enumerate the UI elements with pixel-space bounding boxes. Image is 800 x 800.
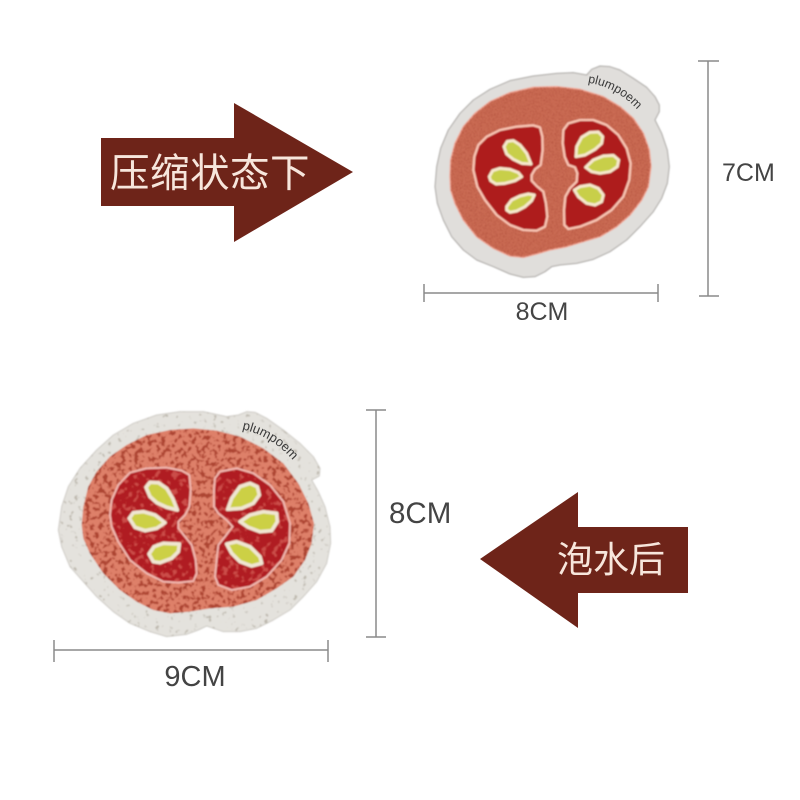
dimension: width 8CM xyxy=(424,284,658,302)
product: soaked tomato sponge xyxy=(57,410,332,638)
label: 8CM width: 8CM xyxy=(516,298,568,326)
brand text: compressed: plumpoem xyxy=(588,75,641,109)
arrow: compressed state xyxy=(101,103,353,242)
brand text: soaked: plumpoem xyxy=(242,422,297,460)
label: after soaking: 泡水后 xyxy=(557,539,665,580)
dimension: height 7CM xyxy=(698,61,719,296)
label: compressed state: 压缩状态下 xyxy=(110,152,310,196)
label: 9CM width: 9CM xyxy=(164,661,226,693)
arrow: after soaking xyxy=(480,492,688,628)
label: 8CM height: 8CM xyxy=(389,497,451,530)
product: compressed tomato sponge xyxy=(434,64,670,279)
dimension: width 9CM xyxy=(54,640,328,662)
seeds xyxy=(129,482,277,566)
dimension: height 8CM xyxy=(366,410,386,637)
label: 7CM height: 7CM xyxy=(722,159,775,187)
seeds xyxy=(489,132,619,212)
